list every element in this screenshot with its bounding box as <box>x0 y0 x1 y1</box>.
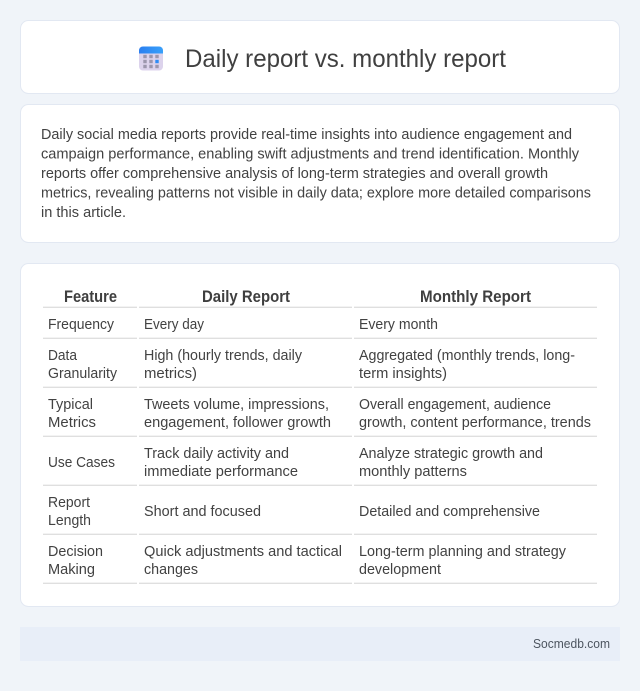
panel: intro text card <box>20 104 620 242</box>
text block: introduction: metrics, revealing patterns not visible in daily data; explore more detailed comparisons <box>41 186 591 202</box>
footer bar <box>20 627 620 661</box>
heading: Daily report vs. monthly report <box>185 45 506 73</box>
text block: introduction: reports offer comprehensive analysis of long-term strategies and overall growth <box>41 166 548 182</box>
row: use cases: Track daily activity and <box>144 446 289 462</box>
row: typical metrics: Typical <box>48 397 93 413</box>
table: feature comparison <box>43 288 597 583</box>
footer credit: Socmedb.com <box>533 637 610 651</box>
row: typical metrics <box>43 397 597 436</box>
row: data granularity: Aggregated (monthly trends, long- <box>359 348 575 364</box>
row: decision making: Decision <box>48 544 103 560</box>
row: frequency <box>43 317 597 338</box>
row: decision making: Quick adjustments and tactical <box>144 544 342 560</box>
panel: comparison table card <box>20 264 620 606</box>
row: decision making: changes <box>144 562 198 578</box>
row: report length: Short and focused <box>144 504 261 520</box>
row: report length <box>43 495 597 534</box>
row: report length: Report <box>48 495 90 511</box>
row: use cases: immediate performance <box>144 464 298 480</box>
table header row: Daily Report <box>202 288 290 306</box>
row: data granularity: metrics) <box>144 366 197 382</box>
row: typical metrics: engagement, follower growth <box>144 415 331 431</box>
row: data granularity: Granularity <box>48 366 118 382</box>
row: report length: Length <box>48 513 91 529</box>
row: typical metrics: Metrics <box>48 415 96 431</box>
row: data granularity: High (hourly trends, daily <box>144 348 303 364</box>
text block: introduction: campaign performance, enabling swift adjustments and trend identification. Monthly <box>41 146 580 162</box>
row: report length: Detailed and comprehensive <box>359 504 540 520</box>
row: frequency: Every month <box>359 317 438 333</box>
row: use cases: Analyze strategic growth and <box>359 446 543 462</box>
row: decision making: development <box>359 562 441 578</box>
row: typical metrics: Overall engagement, audience <box>359 397 551 413</box>
panel: title card <box>20 20 620 94</box>
text block: introduction: Daily social media reports provide real-time insights into audience engagement and <box>41 127 572 143</box>
table header row: Monthly Report <box>420 288 531 306</box>
row: frequency: Every day <box>144 317 205 333</box>
table header row: Feature <box>64 288 117 306</box>
row: typical metrics: Tweets volume, impressions, <box>144 397 329 413</box>
row: data granularity <box>43 348 597 387</box>
icon: calendar <box>139 46 163 70</box>
row: frequency: Frequency <box>48 317 115 333</box>
row: use cases <box>43 446 597 485</box>
row: use cases: Use Cases <box>48 455 115 471</box>
row: data granularity: Data <box>48 348 78 364</box>
row: decision making <box>43 544 597 583</box>
row: typical metrics: growth, content performance, trends <box>359 415 591 431</box>
row: decision making: Making <box>48 562 95 578</box>
text block: introduction: in this article. <box>41 205 126 221</box>
table header row <box>43 288 597 307</box>
row: data granularity: term insights) <box>359 366 447 382</box>
row: use cases: monthly patterns <box>359 464 467 480</box>
row: decision making: Long-term planning and strategy <box>359 544 567 560</box>
text block: introduction <box>41 127 591 221</box>
